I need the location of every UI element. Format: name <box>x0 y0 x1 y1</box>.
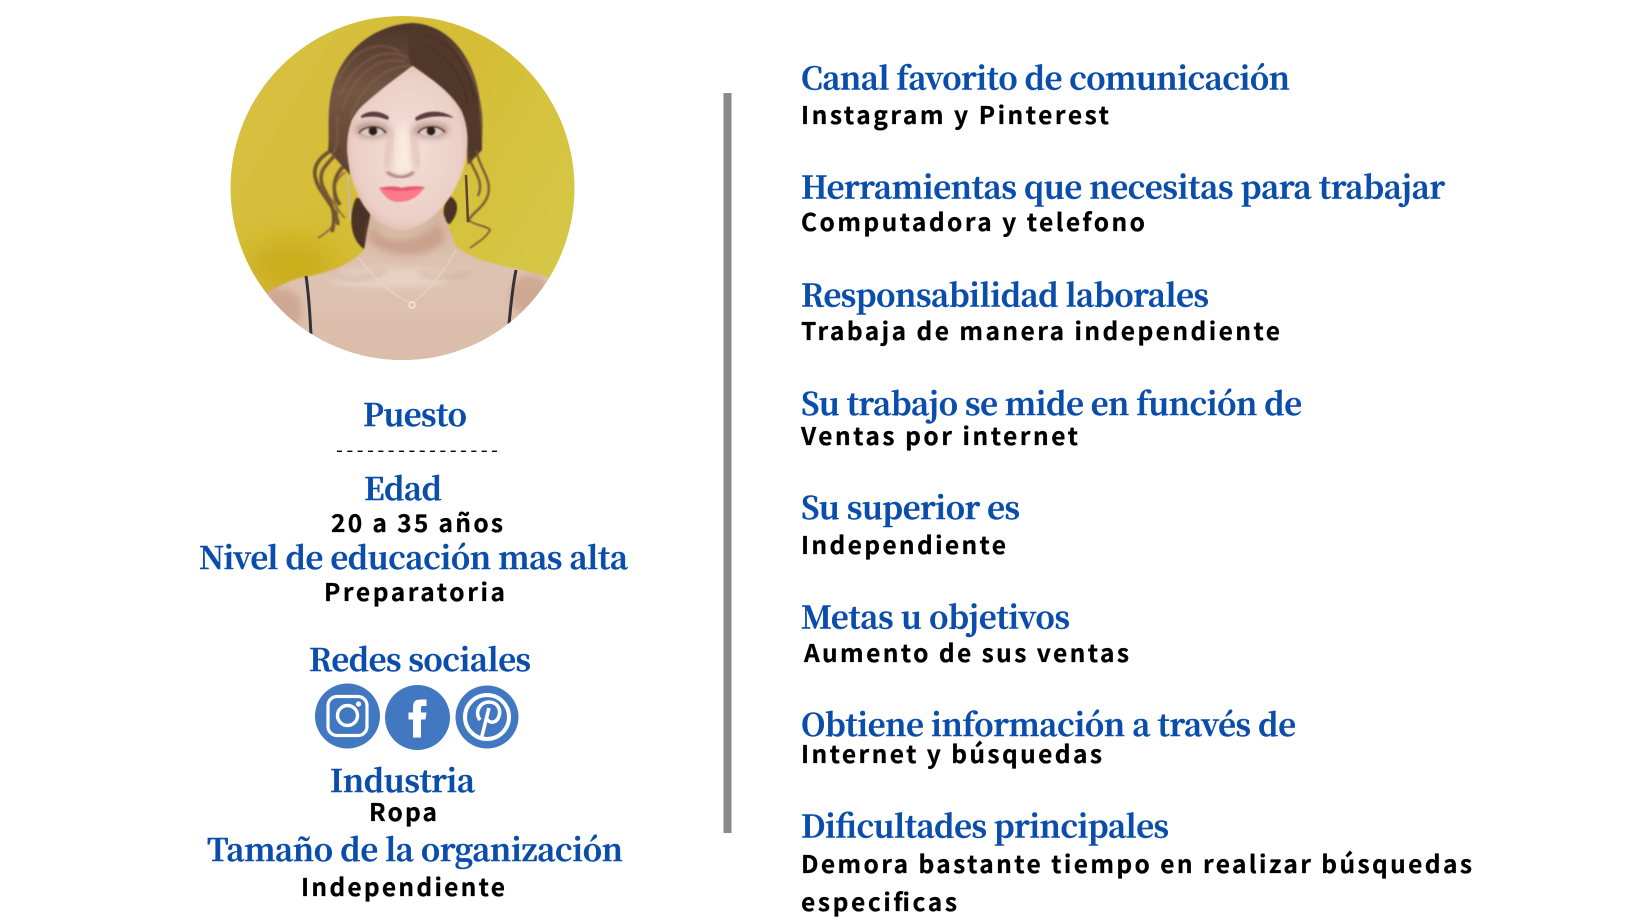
icon: Instagram <box>315 684 380 748</box>
item: measured by: Ventas por internet <box>800 418 1078 453</box>
item: information sources: Obtiene información a través de <box>801 700 1296 745</box>
heading: Puesto: Puesto <box>363 390 467 435</box>
heading: organization size: Tamaño de la organización <box>207 825 623 870</box>
heading: social networks: Redes sociales <box>309 635 531 680</box>
item: goals: Metas u objetivos <box>801 592 1070 638</box>
value: industry: Ropa <box>369 794 437 829</box>
lips <box>379 186 425 202</box>
hair <box>315 23 490 250</box>
face <box>347 66 467 230</box>
item: favourite channel <box>801 54 1290 132</box>
item: information sources: Internet y búsquedas <box>801 736 1102 771</box>
value: organization size: Independiente <box>301 869 505 904</box>
item: main difficulties: Dificultades principales <box>801 802 1169 846</box>
nose <box>387 172 414 177</box>
item: information sources <box>801 700 1296 771</box>
dashed divider: ---------------- <box>336 434 498 463</box>
earrings <box>348 175 350 220</box>
heading: education: Nivel de educación mas alta <box>199 533 629 578</box>
vertical divider <box>724 93 732 833</box>
body <box>260 205 552 365</box>
item: measured by <box>800 379 1302 453</box>
heading: Edad: Edad <box>364 464 442 509</box>
item: responsibilities: Trabaja de manera independiente <box>801 313 1280 348</box>
value: age: 20 a 35 años <box>331 505 503 540</box>
item: superior: Independiente <box>801 527 1006 562</box>
eyes <box>359 126 445 136</box>
item: tools: Herramientas que necesitas para trabajar <box>801 162 1446 208</box>
necklace <box>359 250 456 303</box>
item: tools: Computadora y telefono <box>801 204 1145 239</box>
item: main difficulties <box>801 802 1472 919</box>
item: main difficulties: especificas <box>801 884 957 919</box>
item: goals: Aumento de sus ventas <box>803 635 1129 670</box>
left column: persona data <box>199 390 629 904</box>
item: superior <box>801 483 1020 562</box>
item: favourite channel: Canal favorito de comunicación <box>801 54 1290 98</box>
curls <box>315 150 345 232</box>
item: superior: Su superior es <box>801 483 1020 528</box>
item: measured by: Su trabajo se mide en función de <box>801 379 1302 424</box>
value: education: Preparatoria <box>324 574 505 609</box>
heading: industry: Industria <box>330 756 476 801</box>
dress straps <box>306 276 311 335</box>
social icons row <box>315 684 518 750</box>
item: favourite channel: Instagram y Pinterest <box>801 97 1109 132</box>
item: responsibilities <box>801 270 1280 348</box>
item: tools <box>801 162 1446 239</box>
icon: Pinterest <box>456 686 518 748</box>
item: responsibilities: Responsabilidad laborales <box>801 270 1209 316</box>
item: main difficulties: Demora bastante tiempo en realizar búsquedas <box>801 846 1472 881</box>
eyebrows <box>361 112 454 121</box>
item: goals <box>801 592 1129 670</box>
portrait photo <box>230 16 575 365</box>
icon: Facebook <box>385 685 450 750</box>
right column: work details <box>800 54 1472 919</box>
